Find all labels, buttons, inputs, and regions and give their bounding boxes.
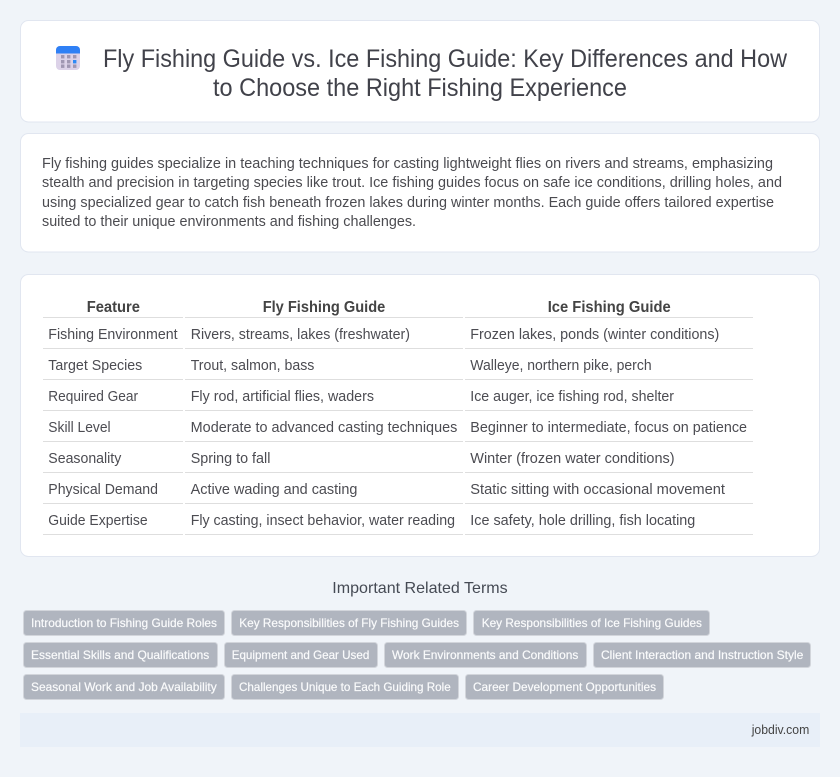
panel: comparison table xyxy=(20,274,820,556)
row: skill level: Moderate to advanced casting techniques xyxy=(191,420,457,436)
row: skill level: Skill Level xyxy=(48,420,111,436)
intro paragraph: stealth and precision in targeting species like trout. Ice fishing guides focus on safe ice conditions, drilling holes, and xyxy=(42,175,782,191)
tag: Essential Skills and Qualifications xyxy=(31,648,209,662)
row: seasonality xyxy=(48,451,675,467)
tag: Challenges Unique to Each Guiding Role xyxy=(239,680,451,694)
row: physical demand xyxy=(48,482,725,498)
tag: Key Responsibilities of Ice Fishing Guides xyxy=(482,616,702,630)
row: guide expertise xyxy=(48,513,695,529)
tag: Equipment and Gear Used xyxy=(232,648,369,662)
footer xyxy=(20,713,820,747)
intro paragraph: using specialized gear to catch fish beneath frozen lakes during winter months. Each guide offers tailored expertise xyxy=(42,195,774,211)
row: required gear xyxy=(48,389,674,405)
table header xyxy=(87,299,671,316)
row: fishing environment: Frozen lakes, ponds (winter conditions) xyxy=(470,327,719,343)
table header: Ice Fishing Guide xyxy=(548,299,671,316)
tag xyxy=(474,610,710,636)
row: fishing environment: Fishing Environment xyxy=(48,327,178,343)
tag xyxy=(384,642,586,668)
tag xyxy=(24,642,218,668)
title xyxy=(103,45,788,102)
row: physical demand: Active wading and casting xyxy=(191,482,357,498)
intro paragraph: suited to their unique environments and fishing challenges. xyxy=(42,214,416,230)
icon: calendar xyxy=(56,46,80,70)
title: to Choose the Right Fishing Experience xyxy=(213,74,627,102)
row: seasonality: Winter (frozen water conditions) xyxy=(470,451,675,467)
heading: important related terms: Important Related Terms xyxy=(332,580,508,597)
panel: title card xyxy=(20,20,820,122)
row: skill level: Beginner to intermediate, focus on patience xyxy=(470,420,747,436)
row: seasonality: Seasonality xyxy=(48,451,122,467)
row: target species: Walleye, northern pike, perch xyxy=(470,358,652,374)
row: seasonality: Spring to fall xyxy=(191,451,270,467)
row: fishing environment: Rivers, streams, lakes (freshwater) xyxy=(191,327,410,343)
row: guide expertise: Guide Expertise xyxy=(48,513,148,529)
footer source: jobdiv.com xyxy=(751,723,809,737)
row: skill level xyxy=(48,420,747,436)
tag: Key Responsibilities of Fly Fishing Guides xyxy=(239,616,459,630)
row: target species: Target Species xyxy=(48,358,142,374)
row: fishing environment xyxy=(48,327,719,343)
table header: Feature xyxy=(87,299,140,316)
row: required gear: Required Gear xyxy=(48,389,138,405)
row: required gear: Ice auger, ice fishing rod, shelter xyxy=(470,389,674,405)
tag: Work Environments and Conditions xyxy=(392,648,578,662)
table header: Fly Fishing Guide xyxy=(263,299,386,316)
intro paragraph: Fly fishing guides specialize in teaching techniques for casting lightweight flies on rivers and streams, emphasizing xyxy=(42,156,773,172)
tag xyxy=(232,610,466,636)
tag xyxy=(594,642,810,668)
row: guide expertise: Fly casting, insect behavior, water reading xyxy=(191,513,455,529)
tag xyxy=(466,674,664,700)
tag: Introduction to Fishing Guide Roles xyxy=(31,616,217,630)
row: physical demand: Static sitting with occasional movement xyxy=(470,482,725,498)
panel: introduction text xyxy=(20,134,820,252)
intro paragraph xyxy=(42,156,782,230)
row: required gear: Fly rod, artificial flies, waders xyxy=(191,389,374,405)
tag xyxy=(232,674,458,700)
tag xyxy=(224,642,378,668)
row: target species: Trout, salmon, bass xyxy=(191,358,314,374)
tag: Client Interaction and Instruction Style xyxy=(601,648,804,662)
row: target species xyxy=(48,358,652,374)
tag xyxy=(24,674,224,700)
tag: Career Development Opportunities xyxy=(473,680,656,694)
tag: Seasonal Work and Job Availability xyxy=(31,680,217,694)
related term tags xyxy=(24,610,810,700)
title: Fly Fishing Guide vs. Ice Fishing Guide: Key Differences and How xyxy=(103,45,788,73)
row: physical demand: Physical Demand xyxy=(48,482,158,498)
row: guide expertise: Ice safety, hole drilling, fish locating xyxy=(470,513,695,529)
tag xyxy=(24,610,224,636)
